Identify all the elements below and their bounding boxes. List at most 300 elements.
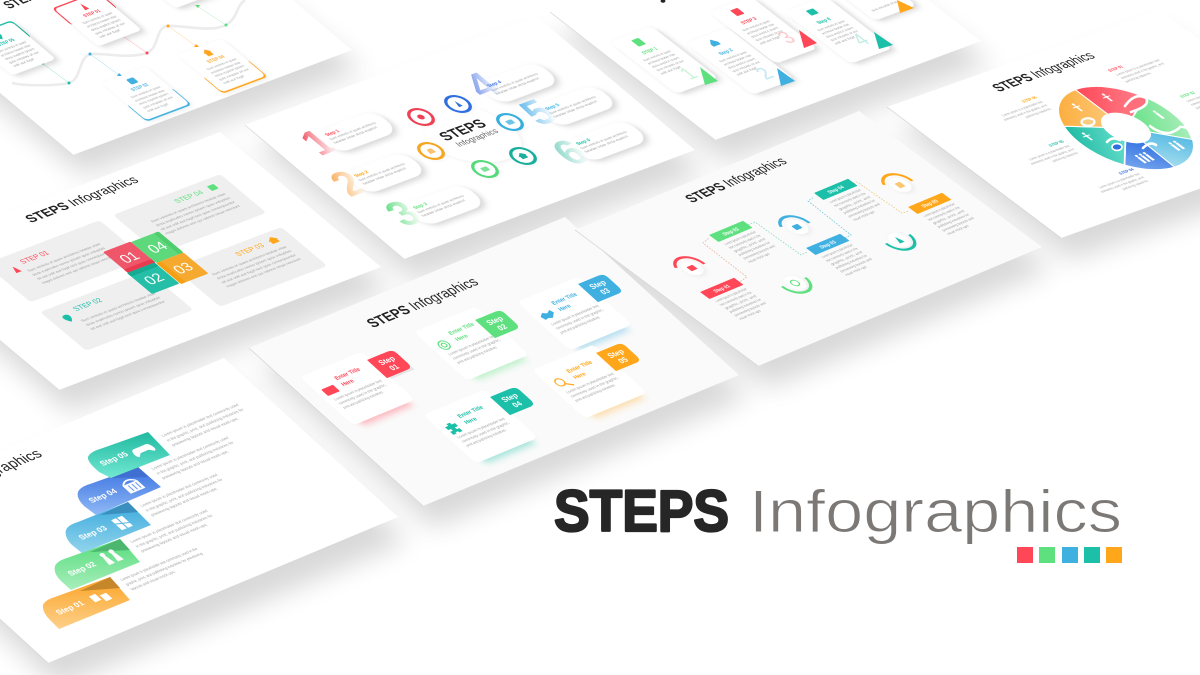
label step 05: [1018, 139, 1081, 169]
card 03 blue: Enter Title: [551, 292, 580, 307]
panel step 01: magni dolores eos qui ratione sequi nesciunt: [41, 254, 117, 285]
fold step 2: 2: [750, 64, 780, 83]
panel: timeline rings slide: [575, 111, 1042, 366]
label block step 01: [700, 278, 774, 321]
card step 4: architecto beatae vitae: [820, 23, 851, 35]
pill step 5: [533, 84, 619, 128]
card: step 05 teal: [0, 20, 57, 76]
label step 02: STEP 02: [1178, 90, 1197, 99]
body text step 01: graphic, print, and publishing industries for previewing: [124, 551, 204, 586]
number 3: 3: [374, 193, 434, 234]
label block step 01: visual mock-ups: [738, 309, 762, 321]
tab 02 green: Step: [484, 314, 506, 327]
card: step 02 blue: [101, 66, 192, 122]
pill step 2: Step 2: [353, 170, 371, 179]
label step 04: publishing industries.: [1121, 179, 1150, 191]
icon: pawns: [98, 548, 124, 565]
card 05 orange: commonly used in the graphic,: [569, 375, 620, 398]
card step 3: Sunt ventiolu et quasi: [741, 19, 771, 32]
card 04 teal: [423, 389, 541, 466]
icon ring light blue: [493, 112, 527, 132]
ring step 03: [774, 213, 817, 238]
panel step 01: Sunt ventiolu et quasi architecto beatae vitae: [26, 243, 102, 273]
panel step 04: magni dolores eos qui ratione sequi nesciunt: [164, 204, 242, 235]
label step 06: Lorem ipsum is a placeholder text: [1001, 100, 1044, 117]
label block step 05: [908, 193, 982, 236]
pill step 5: Sunt ventiolu et quasi architecto: [548, 95, 597, 115]
body text step 04: Lorem ipsum is placeholder text commonly used: [150, 435, 230, 471]
panel step 03: STEP 03: [233, 242, 267, 258]
card step 2: architecto beatae vitae: [722, 54, 753, 66]
tile 02: 02: [140, 271, 169, 288]
card step 1: quia voluptas sit aut: [655, 59, 685, 72]
panel step 03: magni dolores eos qui ratione sequi nesciunt: [225, 257, 303, 288]
label block step 05: Step 05: [920, 199, 941, 209]
card 02 green: commonly used in the graphic,: [451, 337, 502, 360]
label step 02: [1178, 80, 1200, 110]
label step 06: [991, 95, 1054, 125]
panel: hexagon steps slide: [245, 16, 695, 259]
pill step 6: [564, 119, 650, 163]
card step 3: [709, 0, 817, 64]
icon ring green: [468, 159, 502, 179]
tile 03: [156, 253, 209, 284]
card: step 05 teal: quia voluptas sit aut: [8, 51, 40, 64]
body text step 03: previewing layouts and visual mock-ups.: [149, 486, 219, 517]
title: STEPS Infographics: [988, 49, 1099, 94]
icon ring red: [404, 107, 438, 127]
label step 05: publishing industries.: [1051, 151, 1080, 163]
panel step 01: sit aut odit aut fugit sed quia consequuntur: [36, 250, 112, 281]
label block step 03: previewing layouts and: [839, 258, 873, 273]
body text step 05: in the graphic, print, and publishing industries for: [165, 407, 245, 442]
panel step 04: [113, 174, 266, 254]
main title: [554, 478, 1122, 545]
body text step 02: Lorem ipsum is placeholder text commonly used: [129, 508, 209, 544]
title: STEPS Infographics: [363, 275, 483, 331]
panel step 03: [174, 227, 327, 307]
label block step 04: previewing layouts and: [847, 203, 881, 218]
title: STEPS Infographics: [681, 155, 791, 205]
card step 1: dicta explicit ipsam: [651, 56, 681, 69]
title: STEPS Infographics: [21, 173, 142, 225]
card 04 teal: Lorem ipsum is placeholder text: [455, 416, 507, 439]
pill step 3: beatae vitae dicta explicit: [421, 199, 466, 218]
card step 1: [610, 27, 718, 94]
ring step 01: [669, 254, 712, 279]
card step 2: Sunt ventiolu et quasi: [718, 50, 748, 63]
card 03 blue: [517, 276, 635, 353]
pill step 1: [313, 110, 399, 154]
card: step 01 red: architecto beatae vitae: [85, 15, 118, 28]
label block step 05: publishing industries for: [936, 213, 971, 229]
panel step 02: Sunt ventiolu et quasi architecto beatae vitae: [80, 292, 157, 323]
card step 2: [686, 28, 794, 95]
tile 04: [131, 232, 184, 263]
title: STEPS: [435, 117, 491, 144]
label block step 04: Lorem ipsum is placeholder: [828, 188, 863, 204]
card: step 04 orange: dicta explicit ipsam: [214, 64, 246, 78]
tab 05 orange: [596, 342, 642, 371]
label block step 05: graphic, print, and: [931, 209, 966, 225]
ribbon step 03: [66, 502, 151, 553]
pill step 6: beatae vitae dicta explicit: [584, 135, 629, 154]
body text step 03: in the graphic, print, and publishing industries for: [144, 477, 224, 512]
card step 3: odit aut fugit: [758, 35, 781, 45]
fold step 4: [846, 30, 893, 49]
fold step 4: 4: [846, 30, 876, 49]
ring step 04: [879, 229, 922, 253]
card: step 02 blue: architecto beatae vitae: [133, 89, 166, 102]
card: step 02 blue: Sunt ventiolu et quasi: [129, 85, 162, 99]
tab 01 red: 01: [387, 362, 402, 372]
card 03 blue: commonly used in the graphic,: [554, 307, 605, 330]
label block step 03: Step 03: [818, 240, 839, 250]
icon: gamepad: [130, 443, 157, 458]
label step 04: STEP 04: [1117, 167, 1136, 175]
label block step 03: Lorem ipsum is placeholder: [820, 243, 855, 259]
card: step 04 orange: [177, 38, 268, 94]
card: step 05 teal: dicta explicit ipsam: [4, 47, 36, 61]
icon: basket: [120, 477, 145, 494]
panel step 02: [40, 271, 193, 351]
card step 3: quia voluptas sit aut: [754, 29, 784, 42]
tab 04 teal: 04: [510, 399, 525, 409]
fold step 3: 3: [772, 28, 802, 47]
ribbon step 04: [78, 467, 161, 515]
colour legend squares: [1017, 547, 1122, 563]
label step 01: Lorem ipsum is a placeholder text: [1115, 59, 1161, 76]
card step 2: Step 2: [717, 48, 735, 57]
card 01 red: commonly used in the graphic,: [337, 382, 388, 405]
panel step 02: STEP 02: [71, 296, 104, 313]
ribbon step 05: [88, 432, 170, 478]
puzzle joints: [1082, 96, 1193, 150]
number 1: 1: [289, 122, 349, 163]
figures on ring: [1069, 92, 1185, 163]
pill step 3: Sunt ventiolu et quasi architecto: [416, 194, 465, 214]
card 03 blue: Lorem ipsum is placeholder text: [549, 303, 601, 326]
label block step 01: previewing layouts and: [733, 302, 767, 317]
tab 03 blue: 03: [598, 286, 613, 296]
main title: Infographics: [749, 478, 1122, 545]
card: step 05 teal: odit aut fugit: [12, 57, 36, 68]
wavy line: [12, 0, 245, 85]
tab 03 blue: [578, 273, 624, 302]
tab 04 teal: Step: [499, 391, 521, 404]
tab 05 orange: Step: [605, 347, 627, 360]
card step 3: STEP 3: [739, 17, 759, 26]
card 02 green: Lorem ipsum is placeholder text: [446, 333, 498, 356]
panel step 03: sit aut odit aut fugit sed quia consequuntur: [220, 253, 298, 284]
card 03 blue: print and publishing industries.: [558, 315, 602, 335]
card step 1: odit aut fugit: [659, 65, 682, 75]
label step 04: Lorem ipsum is a placeholder text: [1098, 172, 1141, 189]
panel: wavy timeline slide: [0, 0, 352, 155]
label block step 02: text commonly used in the: [728, 234, 762, 250]
label block step 03: [806, 234, 880, 277]
fold step 3: [772, 28, 817, 48]
card step 5: [808, 0, 916, 21]
number 6: 6: [541, 132, 601, 173]
panel step 02: dicta explicabo nemo ipsam quia voluptas: [85, 296, 162, 327]
body text step 02: in the graphic, print, and publishing industries for: [134, 513, 214, 548]
card: step 04 orange: Sunt ventiolu et quasi: [205, 57, 238, 71]
card 01 red: print and publishing industries.: [341, 390, 385, 410]
tile 03: 03: [169, 260, 198, 277]
card step 5: quia voluptas sit aut: [870, 0, 900, 12]
panel step 04: STEP 04: [172, 189, 206, 205]
label block step 04: publishing industries for: [842, 199, 877, 215]
card 05 orange: Here: [572, 372, 589, 381]
label block step 03: publishing industries for: [834, 254, 869, 270]
tab 02 green: [475, 309, 521, 338]
tab 03 blue: Step: [587, 278, 609, 291]
card: step 03 top: [131, 0, 219, 8]
body text step 02: previewing layouts and visual mock-ups.: [139, 522, 209, 553]
fold step 1: 1: [674, 64, 704, 83]
panel step 04: sit aut odit aut fugit sed quia consequuntur: [159, 200, 237, 231]
body text step 05: Lorem ipsum is placeholder text commonly used: [160, 402, 240, 438]
panel: enter title cards slide: [249, 217, 739, 506]
puzzle ring chart: [1030, 74, 1200, 182]
pill step 1: Sunt ventiolu et quasi architecto: [328, 121, 377, 141]
body text step 05: previewing layouts and visual mock-ups.: [170, 416, 240, 447]
card: step 04 orange: odit aut fugit: [222, 74, 246, 85]
card: step 02 blue: odit aut fugit: [146, 102, 170, 113]
ribbon step 01: [43, 577, 130, 629]
tab 01 red: [367, 349, 415, 380]
label step 01: [1106, 54, 1170, 84]
panel step 01: dicta explicabo nemo ipsam quia voluptas: [31, 246, 106, 277]
connectors and dots: [40, 5, 228, 84]
icon ring orange: [414, 141, 448, 161]
label block step 02: visual mock-ups: [747, 252, 771, 264]
card step 2: quia voluptas sit aut: [731, 60, 761, 73]
card 01 red: Lorem ipsum is placeholder text: [332, 378, 384, 401]
label block step 04: text commonly used in the: [833, 192, 867, 208]
label step 04: commonly used in the graphic, print: [1099, 176, 1146, 194]
card: step 01 red: Sunt ventiolu et quasi: [81, 11, 114, 25]
label block step 01: Lorem ipsum is placeholder: [714, 287, 749, 303]
label block step 05: visual mock-ups: [946, 224, 970, 236]
card: step 01 red: dicta explicit ipsam: [90, 18, 122, 32]
pill step 4: Sunt ventiolu et quasi architecto: [490, 72, 539, 92]
label step 05: commonly used in the graphic, print: [1029, 148, 1076, 166]
panel step 02: sit aut odit aut fugit sed quia consequuntur: [89, 300, 167, 331]
number 4: 4: [453, 65, 513, 106]
pill step 4: [475, 61, 561, 105]
label block step 02: Lorem ipsum is placeholder: [723, 230, 758, 246]
label block step 04: graphic, print, and: [837, 195, 872, 211]
card step 4: dicta explicit ipsam: [825, 26, 855, 39]
panel step 04: Sunt ventiolu et quasi architecto beatae vitae: [150, 192, 227, 223]
tab 02 green: 02: [495, 322, 510, 332]
number 5: 5: [509, 92, 569, 133]
ribbon step 05: Step 05: [97, 450, 131, 468]
card 02 green: [414, 306, 532, 383]
card 03 blue: Here: [557, 304, 574, 313]
ribbon step 01: Step 01: [53, 599, 87, 617]
icon: cubes: [89, 590, 112, 605]
card: step 02 blue: STEP 02: [130, 82, 151, 93]
label block step 02: [709, 221, 783, 264]
card 01 red: Here: [340, 379, 357, 388]
card step 3: dicta explicit ipsam: [750, 26, 780, 39]
tab 01 red: Step: [376, 354, 398, 367]
title fragment: [630, 0, 738, 3]
pill step 2: [342, 151, 428, 195]
card 01 red: Enter Title: [334, 367, 363, 382]
card: step 04 orange: architecto beatae vitae: [209, 61, 242, 74]
ribbon step 04: Step 04: [86, 487, 120, 505]
panel step 01: STEP 01: [17, 249, 51, 265]
ring step 05: [877, 171, 920, 196]
pill step 3: [401, 183, 487, 227]
panel step 01: [0, 220, 145, 302]
label step 01: publishing industries.: [1124, 71, 1153, 83]
pill step 4: beatae vitae dicta explicit: [495, 77, 540, 96]
label step 06: publishing industries.: [1024, 107, 1053, 119]
pill step 2: beatae vitae dicta explicit: [362, 167, 407, 186]
card step 4: quia voluptas sit aut: [829, 29, 859, 42]
icon ring teal: [506, 146, 540, 166]
panel step 03: dicta explicabo nemo ipsam quia voluptas: [216, 249, 293, 280]
card step 2: dicta explicit ipsam: [727, 57, 757, 70]
card step 2: odit aut fugit: [735, 66, 758, 76]
card 04 teal: Enter Title: [457, 405, 486, 420]
panel step 03: Sunt ventiolu et quasi architecto beatae vitae: [211, 245, 288, 276]
label block step 01: graphic, print, and: [723, 294, 758, 310]
card 04 teal: print and publishing industries.: [464, 428, 508, 448]
title: Infographics: [453, 127, 501, 148]
label step 01: commonly used in the graphic, print: [1119, 62, 1166, 80]
pill step 1: beatae vitae dicta explicit: [333, 126, 378, 145]
label block step 04: [814, 179, 888, 222]
tab 04 teal: [490, 386, 536, 415]
label block step 05: text commonly used in the: [927, 206, 961, 222]
label block step 02: Step 02: [721, 227, 742, 237]
pill step 2: Sunt ventiolu et quasi architecto: [357, 162, 406, 182]
ribbon step 02: [55, 539, 140, 590]
card 01 red: [300, 351, 418, 428]
main title: STEPS: [554, 479, 729, 544]
ribbon step 03: Step 03: [76, 524, 110, 542]
body text step 03: Lorem ipsum is placeholder text commonly used: [139, 472, 219, 508]
card step 4: Step 6: [815, 17, 833, 26]
pill step 3: Step 3: [412, 202, 430, 211]
label block step 04: Step 04: [826, 185, 847, 195]
card 05 orange: print and publishing industries.: [573, 383, 617, 403]
card 05 orange: [532, 344, 650, 421]
label block step 02: publishing industries for: [737, 241, 772, 257]
label step 06: STEP 06: [1020, 95, 1039, 103]
card: step 04 orange: quia voluptas sit aut: [218, 68, 250, 81]
label block step 05: Lorem ipsum is placeholder: [922, 202, 957, 218]
card 04 teal: Here: [463, 417, 480, 426]
card 02 green: Enter Title: [448, 322, 477, 337]
label block step 02: previewing layouts and: [742, 245, 776, 260]
card step 1: Sunt ventiolu et quasi: [642, 49, 672, 62]
panel: four tile quadrant slide: [0, 132, 381, 390]
pill step 1: Step 1: [324, 129, 342, 138]
pill step 5: beatae vitae dicta explicit: [553, 100, 598, 119]
tile 01: 01: [116, 249, 144, 266]
card 02 green: Here: [454, 334, 471, 343]
pill step 5: Step 5: [544, 103, 562, 112]
card step 1: STEP 1: [640, 47, 660, 56]
body text step 01: Lorem ipsum is placeholder text commonly used in the: [119, 546, 199, 582]
body text step 01: layouts and visual mock-ups.: [129, 569, 177, 591]
card: step 01 red: [52, 0, 143, 47]
label block step 03: visual mock-ups: [844, 265, 868, 277]
fold step 1: [674, 64, 718, 85]
label block step 03: text commonly used in the: [825, 247, 859, 263]
card step 4: [784, 0, 892, 64]
pill step 6: Sunt ventiolu et quasi architecto: [579, 130, 628, 150]
card step 4: odit aut fugit: [833, 35, 856, 45]
card step 1: architecto beatae vitae: [646, 53, 677, 65]
ribbon step 02: Step 02: [65, 560, 99, 578]
label block step 05: previewing layouts and: [941, 217, 975, 232]
label step 04: [1088, 167, 1151, 197]
card step 4: Sunt ventiolu et quasi: [816, 19, 846, 32]
pill step 4: Step 4: [486, 80, 504, 89]
panel: vertical cards slide: [550, 0, 981, 140]
panel: puzzle ring slide: [887, 10, 1200, 238]
label step 01: STEP 01: [1106, 64, 1125, 73]
tile 04: 04: [144, 239, 172, 256]
fold step 5: [897, 0, 914, 13]
card: step 01 red: quia voluptas sit aut: [94, 22, 126, 35]
label block step 01: publishing industries for: [728, 298, 763, 314]
card 02 green: print and publishing industries.: [455, 345, 499, 365]
card 04 teal: commonly used in the graphic,: [460, 420, 511, 443]
label step 05: Lorem ipsum is a placeholder text: [1028, 144, 1071, 161]
card: step 04 orange: STEP 04: [206, 54, 227, 65]
pill step 6: Step 6: [575, 138, 593, 147]
label step 05: STEP 05: [1047, 139, 1066, 147]
title: [435, 116, 501, 150]
number 2: 2: [319, 163, 379, 204]
label block step 03: graphic, print, and: [829, 250, 864, 266]
icon: map: [111, 516, 133, 530]
body text step 04: previewing layouts and visual mock-ups.: [160, 449, 230, 480]
tile 01: [103, 242, 156, 273]
fold step 2: [750, 64, 795, 86]
dashed connectors: [703, 182, 909, 283]
central blob: [407, 98, 536, 174]
card: step 01 red: odit aut fugit: [98, 28, 122, 39]
card: step 02 blue: dicta explicit ipsam: [138, 92, 170, 106]
label block step 01: text commonly used in the: [719, 291, 753, 307]
card: step 01 red: STEP 01: [82, 8, 103, 19]
card step 3: architecto beatae vitae: [745, 23, 776, 35]
panel: staircase ribbon slide: [0, 358, 398, 663]
body text step 04: in the graphic, print, and publishing industries for: [155, 440, 235, 475]
label step 06: commonly used in the graphic, print: [1002, 104, 1049, 122]
card: step 05 teal: architecto beatae vitae: [0, 44, 32, 57]
label block step 01: Step 01: [712, 284, 733, 294]
card 05 orange: Enter Title: [566, 360, 595, 375]
card: step 02 blue: quia voluptas sit aut: [142, 96, 174, 109]
card 05 orange: Lorem ipsum is placeholder text: [564, 371, 616, 394]
tile 02: [127, 263, 180, 294]
tab 05 orange: 05: [616, 355, 631, 365]
ring step 02: [775, 272, 818, 296]
icon ring blue: [441, 94, 475, 114]
panel step 04: dicta explicabo nemo ipsam quia voluptas: [155, 196, 232, 227]
